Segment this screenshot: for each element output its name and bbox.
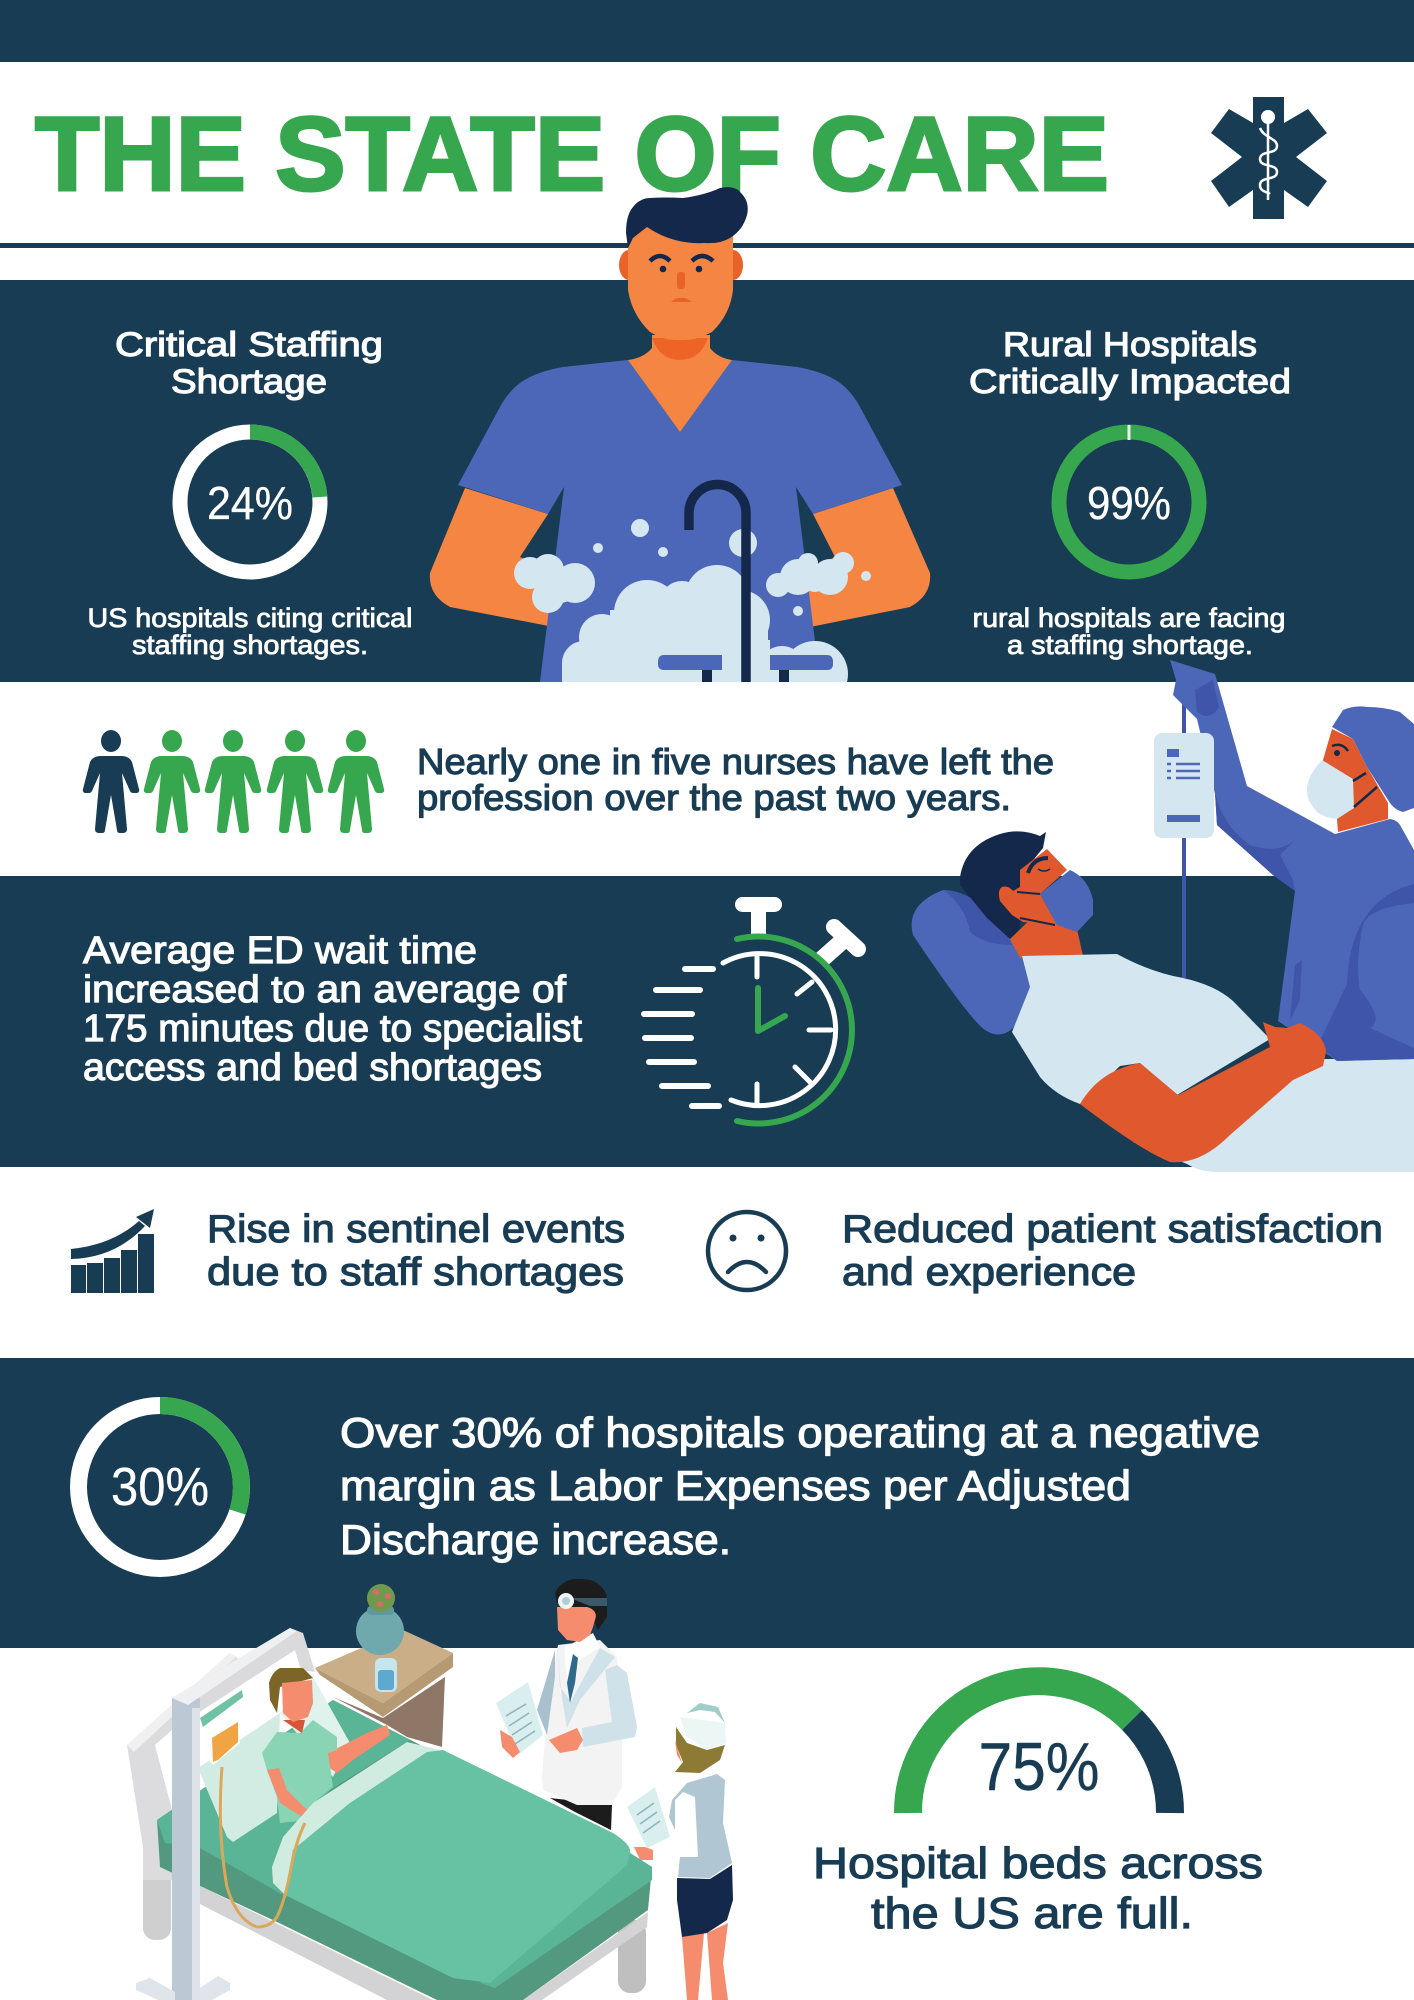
heading: Rural Hospitals bbox=[1003, 326, 1257, 364]
side rail bbox=[198, 1885, 648, 2000]
mattress side bbox=[157, 1700, 652, 2000]
front leg bbox=[618, 1920, 646, 1993]
iv line bbox=[1182, 700, 1186, 978]
nightstand top bbox=[315, 1630, 453, 1717]
tie bbox=[567, 1654, 578, 1703]
heading: Critically Impacted bbox=[969, 363, 1291, 401]
iv pole bbox=[136, 1628, 297, 2000]
iv bag bbox=[200, 1690, 243, 1765]
text: wait time: 175 minutes due to specialist bbox=[83, 1008, 582, 1050]
icon: star of life bbox=[1211, 97, 1327, 219]
back pillow bbox=[280, 1677, 350, 1777]
front pillow bbox=[198, 1713, 280, 1842]
heading: Shortage bbox=[171, 363, 327, 401]
foam on hands bbox=[514, 552, 854, 613]
iv bag bbox=[1154, 733, 1214, 838]
icon: sad face bbox=[708, 1212, 786, 1290]
nurse neck and face bbox=[1323, 729, 1388, 832]
icon: five people bbox=[83, 730, 384, 833]
title: THE STATE OF CARE bbox=[35, 96, 1109, 213]
hair bbox=[675, 1727, 725, 1773]
face bbox=[282, 1680, 313, 1722]
hair bbox=[626, 187, 748, 248]
neck shadow bbox=[652, 338, 708, 360]
mask straps and eye bbox=[1332, 745, 1377, 807]
rear leg bbox=[143, 1847, 171, 1940]
left arm bbox=[267, 1768, 345, 1837]
title rule bbox=[0, 243, 1414, 248]
patient neck bbox=[1010, 910, 1083, 958]
nurse mask bbox=[1307, 760, 1354, 819]
gown bbox=[262, 1720, 337, 1823]
neck bbox=[283, 1720, 305, 1733]
patient brow and eye bbox=[1017, 858, 1055, 925]
nightstand body bbox=[333, 1677, 445, 1747]
cap bbox=[680, 1703, 726, 1750]
coat bbox=[542, 1640, 622, 1805]
mouth bbox=[671, 298, 692, 302]
blouse bbox=[669, 1774, 732, 1878]
clipboard bbox=[627, 1787, 670, 1848]
eyes bbox=[660, 266, 702, 272]
head mirror bbox=[558, 1593, 574, 1609]
pillow bbox=[912, 890, 1030, 1035]
text: nurses leaving: Nearly one in five nurses have left the bbox=[417, 741, 1054, 782]
donut 99% bbox=[1059, 425, 1199, 572]
hand bbox=[634, 1847, 653, 1860]
face bbox=[628, 222, 733, 340]
heading: Critical Staffing bbox=[115, 326, 383, 364]
text: patient satisfaction: Reduced patient satisfaction bbox=[842, 1208, 1383, 1251]
brows bbox=[650, 256, 713, 261]
illustration: nurse washing hands bbox=[430, 187, 930, 707]
iv tube bbox=[220, 1767, 305, 1927]
text: sentinel events: due to staff shortages bbox=[207, 1251, 624, 1294]
donut 24% bbox=[180, 432, 320, 572]
face bbox=[557, 1607, 596, 1642]
illustration: hospital bed scene bbox=[127, 1579, 733, 2000]
left ear bbox=[619, 250, 628, 280]
value: 99% bbox=[1087, 477, 1171, 529]
head band bbox=[570, 1598, 607, 1606]
text: nurses leaving: profession over the past two years. bbox=[417, 777, 1011, 818]
pillow shade bbox=[943, 890, 1012, 945]
illustration: patient and nurse bbox=[912, 660, 1414, 1172]
caption: staffing shortages. bbox=[132, 630, 368, 660]
scrub top bbox=[458, 360, 902, 682]
caption: a staffing shortage. bbox=[1007, 630, 1253, 660]
bed sheet bbox=[1133, 1059, 1414, 1172]
left arm bbox=[430, 488, 548, 626]
value: 24% bbox=[207, 477, 293, 529]
text: wait time: Average ED wait time bbox=[83, 930, 477, 972]
caption: rural hospitals are facing bbox=[972, 603, 1286, 633]
faucet handles bbox=[658, 655, 833, 682]
gauge 75% bbox=[908, 1681, 1170, 1813]
nurse body bbox=[1170, 660, 1414, 1061]
band: wait time bbox=[0, 876, 1414, 1167]
top band bbox=[0, 0, 1414, 62]
right arm bbox=[808, 488, 930, 626]
text: negative margin: margin as Labor Expenses per Adjusted bbox=[340, 1462, 1131, 1509]
patient hair bbox=[960, 831, 1046, 939]
patient arm bbox=[1080, 1022, 1326, 1162]
hair bbox=[269, 1668, 313, 1713]
skirt bbox=[677, 1865, 733, 1937]
text: sentinel events: Rise in sentinel events bbox=[207, 1208, 625, 1251]
right ear bbox=[733, 250, 743, 280]
blanket fold bbox=[272, 1742, 440, 1895]
patient mask bbox=[1040, 870, 1093, 932]
clipboard bbox=[496, 1682, 543, 1755]
right sleeve bbox=[582, 1665, 637, 1747]
left sleeve bbox=[537, 1650, 555, 1735]
bed frame bbox=[127, 1628, 648, 2000]
panel: critical staffing bbox=[88, 326, 412, 660]
neck bbox=[628, 335, 732, 432]
band: margin bbox=[0, 1358, 1414, 1648]
text: beds full: the US are full. bbox=[871, 1889, 1193, 1938]
lapels bbox=[557, 1648, 615, 1728]
foam in sink bbox=[562, 565, 848, 682]
face bbox=[675, 1740, 682, 1763]
icon: stopwatch bbox=[644, 897, 858, 1124]
value 30%: 30% bbox=[111, 1457, 209, 1517]
value 75%: 75% bbox=[978, 1729, 1100, 1805]
gown bbox=[1012, 954, 1270, 1104]
donut 30% bbox=[78, 1406, 242, 1568]
collar bbox=[565, 1633, 600, 1703]
right arm bbox=[328, 1725, 390, 1773]
mattress top bbox=[157, 1700, 652, 1988]
bubbles bbox=[593, 519, 871, 616]
top bar bbox=[172, 1628, 315, 1715]
nose bbox=[677, 272, 685, 289]
nurse shading bbox=[1195, 680, 1414, 1061]
blanket bbox=[285, 1750, 630, 1983]
text: beds full: Hospital beds across bbox=[813, 1839, 1263, 1888]
patient bbox=[262, 1668, 390, 1837]
faucet bbox=[689, 484, 746, 682]
wrist band bbox=[308, 1812, 324, 1828]
text: negative margin: Discharge increase. bbox=[340, 1516, 731, 1563]
water glass bbox=[375, 1658, 397, 1692]
hands bbox=[500, 1728, 583, 1758]
panel: rural hospitals bbox=[969, 326, 1291, 660]
patient face bbox=[999, 849, 1067, 925]
caption: US hospitals citing critical bbox=[88, 603, 412, 633]
doctor bbox=[496, 1579, 637, 1830]
text: patient satisfaction: and experience bbox=[842, 1251, 1136, 1294]
legs bbox=[682, 1923, 728, 2000]
hair bbox=[555, 1579, 607, 1630]
vase and flowers bbox=[356, 1584, 404, 1655]
trousers bbox=[550, 1798, 612, 1830]
head rail bbox=[127, 1653, 243, 1880]
nurse with cap bbox=[627, 1703, 733, 2000]
nurse cap bbox=[1332, 706, 1414, 812]
text: negative margin: Over 30% of hospitals operating at a negative bbox=[340, 1409, 1260, 1456]
icon: rising chart bbox=[71, 1209, 154, 1293]
text: wait time: increased to an average of bbox=[83, 969, 566, 1011]
band: staffing bbox=[0, 280, 1414, 682]
text: wait time: access and bed shortages bbox=[83, 1047, 542, 1089]
